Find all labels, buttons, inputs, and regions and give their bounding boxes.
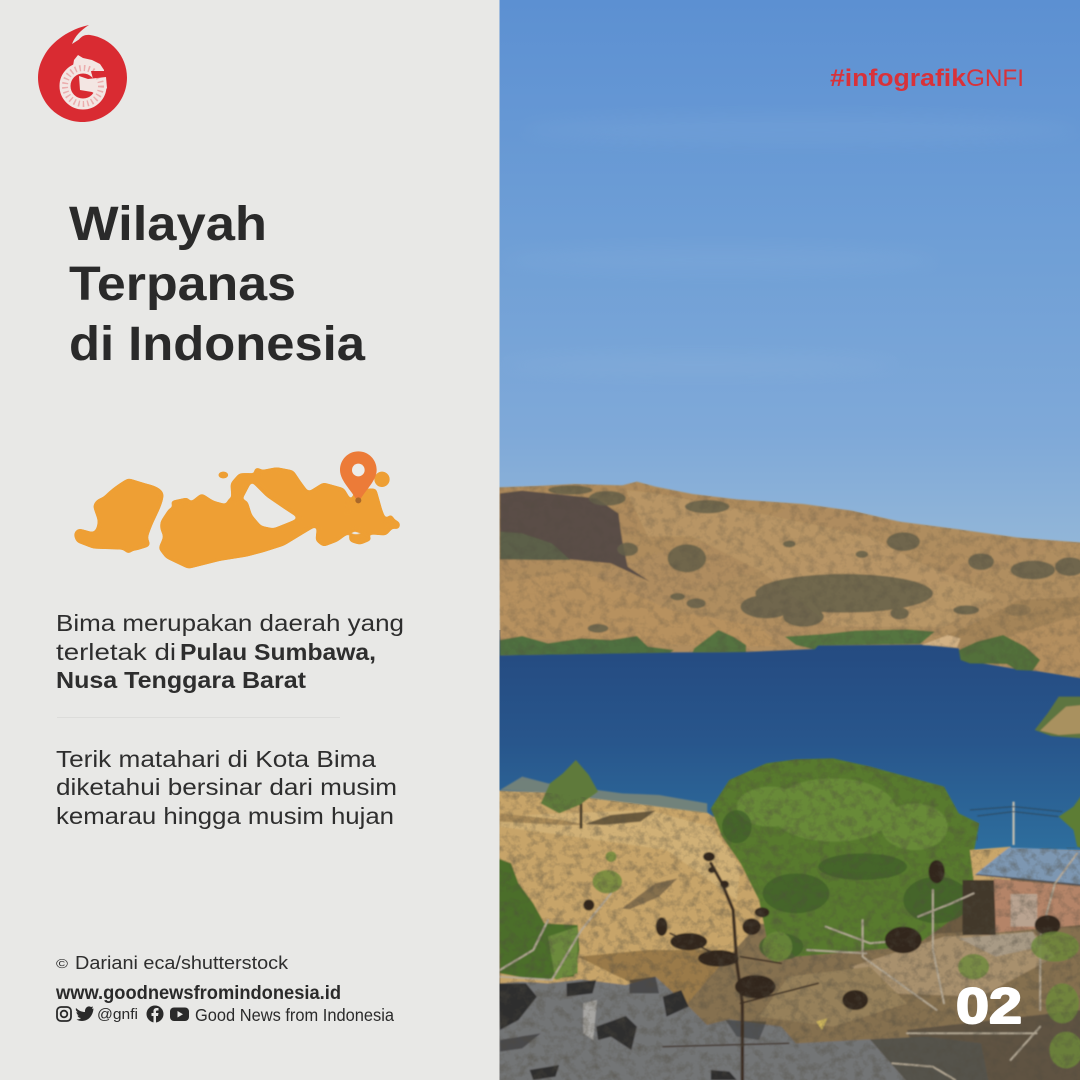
hillside: dark burnt scrub bbox=[500, 491, 650, 582]
hillside: scrub patches bbox=[548, 485, 1080, 633]
text block: Bima location: Bima merupakan daerah yang bbox=[56, 610, 404, 636]
foreground: brown scrub base bbox=[685, 923, 1080, 1080]
hashtag label: GNFI bbox=[966, 65, 1024, 92]
foreground: left bush bbox=[498, 858, 580, 980]
foreground: small tree bbox=[541, 760, 598, 829]
photo credit: Dariani eca/shutterstock bbox=[75, 952, 289, 973]
title bbox=[69, 198, 365, 371]
icon: youtube bbox=[170, 1008, 189, 1021]
hillside: lighter grass slopes bbox=[628, 491, 972, 620]
photo: grain texture over foreground bbox=[499, 750, 1080, 1080]
photo: sky bbox=[499, 0, 1080, 545]
hashtag label bbox=[830, 65, 1024, 92]
hillside: foreground right spur bbox=[950, 597, 1080, 648]
icon: twitter bbox=[76, 1006, 94, 1021]
social media row bbox=[57, 1005, 394, 1025]
map: Lombok island bbox=[74, 478, 163, 554]
logo: GNFI red six with garuda ring bbox=[38, 25, 127, 122]
map: location pin bbox=[340, 451, 377, 503]
title: Wilayah bbox=[69, 198, 267, 251]
foreground: house bbox=[962, 847, 1080, 935]
map: West Nusa Tenggara islands with pin bbox=[74, 451, 400, 569]
photo: far hillside bbox=[498, 482, 1080, 678]
text block: sun in Kota Bima: Terik matahari di Kota Bima bbox=[56, 746, 377, 772]
photo: small islet on the lake bbox=[1035, 697, 1080, 738]
photo credit: © bbox=[56, 956, 69, 971]
title: di Indonesia bbox=[69, 318, 365, 371]
left panel background bbox=[0, 0, 500, 1080]
foreground: rubble bbox=[959, 932, 1040, 957]
foreground: bare branches bbox=[663, 863, 818, 1080]
panel: landscape photo bbox=[498, 0, 1080, 1080]
photo: foreground bbox=[498, 758, 1080, 1080]
text block: Bima location: Pulau Sumbawa, bbox=[180, 639, 376, 665]
map: northern peninsula bbox=[231, 473, 255, 498]
foreground: right tree bbox=[1059, 793, 1080, 848]
text block: Bima location bbox=[56, 610, 404, 693]
foreground: utility pole bbox=[1011, 800, 1016, 846]
photo: backing ground bbox=[500, 850, 1080, 984]
text block: sun in Kota Bima: kemarau hingga musim hujan bbox=[56, 803, 394, 829]
channel name: Good News from Indonesia bbox=[195, 1005, 394, 1025]
website url: www.goodnewsfromindonesia.id bbox=[55, 983, 341, 1004]
text block: sun in Kota Bima bbox=[56, 746, 397, 829]
text block: sun in Kota Bima: diketahui bersinar dari musim bbox=[56, 774, 397, 800]
page number: 02 bbox=[956, 978, 1022, 1034]
map: Sumbawa island bbox=[159, 467, 397, 569]
foreground: sandy slope bbox=[500, 790, 765, 986]
photo: lake water bbox=[499, 630, 1080, 855]
foreground: shore grass bbox=[500, 777, 707, 813]
hashtag label: #infografik bbox=[830, 65, 967, 92]
icon: instagram bbox=[57, 1007, 71, 1021]
text block: Bima location: Nusa Tenggara Barat bbox=[56, 667, 306, 693]
map: island landmasses bbox=[74, 467, 400, 569]
title: Terpanas bbox=[69, 258, 296, 311]
photo: grain texture over hillside bbox=[499, 480, 1080, 690]
text block: Bima location: terletak di bbox=[56, 639, 176, 665]
handle: @gnfi bbox=[97, 1007, 138, 1023]
map: small islets bbox=[132, 468, 400, 551]
shoreline mangroves bbox=[500, 636, 674, 655]
icon: facebook bbox=[146, 1006, 164, 1023]
foreground: big green tree bbox=[711, 758, 979, 957]
foreground: limestone rocks bbox=[498, 977, 907, 1080]
